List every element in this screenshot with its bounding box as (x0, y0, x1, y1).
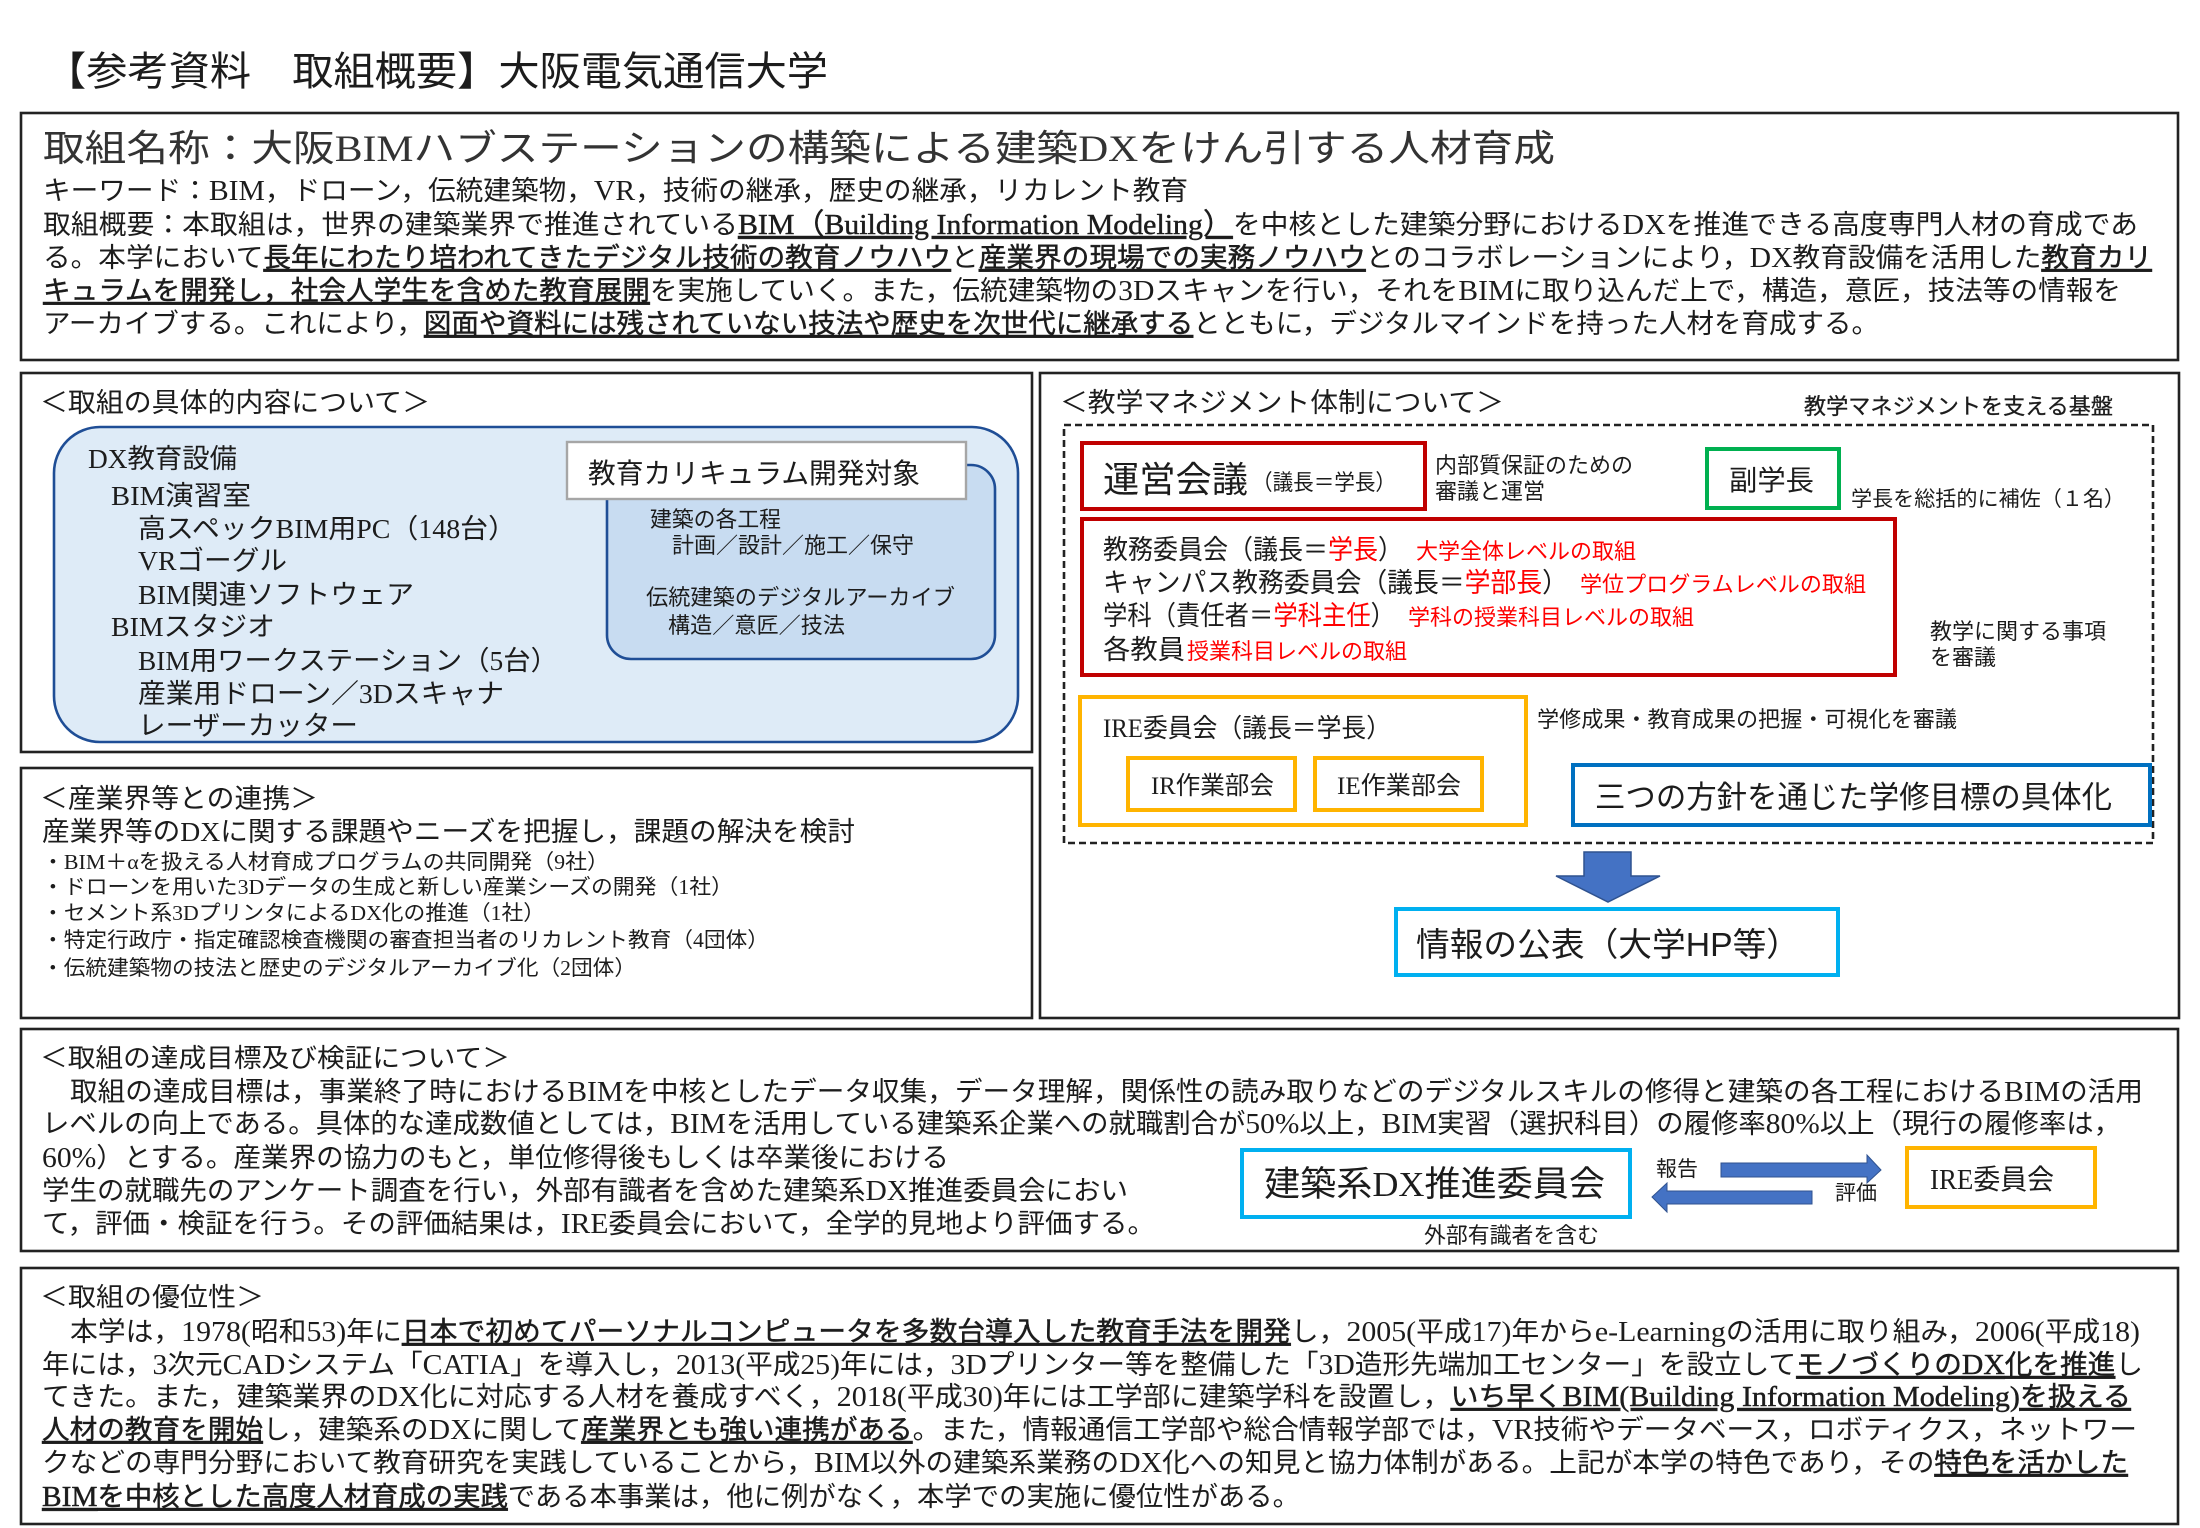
text block: goals: 取組の達成目標は，事業終了時における BIMを中核としたデータ収集，データ理解，関係性の読み取りなどのデジタルスキルの修得と建築の各工程における BIMの活用 (70, 1076, 2143, 1108)
note: council role: 内部質保証のための (1435, 453, 1633, 478)
box: IRE committee: IRE委員会（議長＝学長） (1103, 714, 1391, 743)
dashed frame (1064, 425, 2153, 843)
text block: overview: 取組概要：本取組は，世界の建築業界で推進されている BIM（Building Information Modeling） を中核とした建築分野における DXを推進できる高度専門人材の育成であ (43, 209, 2138, 241)
list: collaboration items (42, 850, 769, 980)
box: vice president: 副学長 (1729, 465, 1814, 496)
list: collaboration items: ・BIM＋αを扱える人材育成プログラムの共同開発（9社） (42, 850, 609, 874)
box: steering council (1082, 443, 1425, 509)
box: DX promotion committee (1242, 1150, 1630, 1217)
box: IRE committee: IE作業部会 (1337, 772, 1461, 800)
box: DX promotion committee: 建築系DX推進委員会 (1264, 1165, 1605, 1204)
box: DX education facilities: BIM用ワークステーション（5台） (138, 646, 558, 676)
list: collaboration items: ・ドローンを用いた3Dデータの生成と新しい産業シーズの開発（1社） (42, 875, 733, 899)
text block: overview: アーカイブする。これにより， 図面や資料には残されていない技法や歴史を次世代に継承する とともに，デジタルマインドを持った人材を育成する。 (43, 309, 1879, 339)
heading: academic management: ＜教学マネジメント体制について＞ (1060, 388, 1504, 418)
text block: goals: て，評価・検証を行う。その評価結果は， IRE委員会において，全学的見地より評価する。 (42, 1208, 1155, 1240)
list: collaboration items: ・特定行政庁・指定確認検査機関の審査担当者のリカレント教育（4団体） (42, 928, 769, 952)
box: IRE committee (1907, 1148, 2095, 1207)
heading: industry collaboration: ＜産業界等との連携＞ (40, 784, 318, 814)
box: DX education facilities: DX教育設備 (88, 444, 237, 474)
box: DX education facilities (54, 427, 1018, 742)
label: evaluation: 評価 (1835, 1182, 1877, 1205)
label: foundation: 教学マネジメントを支える基盤 (1804, 394, 2113, 419)
panel: overview (21, 113, 2178, 360)
box: curriculum targets (607, 465, 995, 659)
box: IRE committee: IRE委員会 (1930, 1164, 2054, 1196)
heading: advantages: ＜取組の優位性＞ (40, 1283, 264, 1312)
box: DX education facilities: 高スペックBIM用PC（148台） (138, 514, 516, 544)
text block: overview: る。本学において長年にわたり培われてきたデジタル技術の教育ノウハウ と産業界の現場での実務ノウハウ とのコラボレーションにより， DX教育設備を活用した教育カリ (43, 242, 2152, 274)
text block: advantages: てきた。また，建築業界の DX化に対応する人材を養成すべく， 2018(平成30)年には工学部に建築学科を設置し， いち早くBIM(Building Information Modeling) を扱える (42, 1381, 2131, 1413)
panel: industry collaboration (21, 768, 1032, 1018)
heading: program name: 取組名称：大阪BIMハブステーションの構築による建築DXをけん引する人材育成 (43, 128, 1555, 170)
note: council role (1435, 453, 1633, 504)
text block: goals: 学生の就職先のアンケート調査を行い，外部有識者を含めた建築系 DX推進委員会におい (42, 1175, 1128, 1207)
text: collaboration summary: 産業界等のDXに関する課題やニーズを把握し，課題の解決を検討 (42, 817, 855, 847)
box: DX education facilities: BIMスタジオ (111, 612, 275, 642)
box: IRE committee: IR作業部会 (1151, 772, 1274, 800)
heading: goals and verification: ＜取組の達成目標及び検証について＞ (40, 1044, 510, 1073)
box: learning goals (1573, 765, 2150, 825)
box: learning goals: 三つの方針を通じた学修目標の具体化 (1595, 780, 2112, 815)
panel: academic management (1040, 373, 2179, 1018)
box: academic committees: 各教員 (1103, 635, 1185, 665)
panel: specific content (21, 373, 1032, 752)
box: steering council: 運営会議 (1103, 459, 1248, 500)
text block: overview (43, 209, 2152, 339)
box: DX education facilities: レーザーカッター (138, 711, 358, 741)
text block: goals: レベルの向上である。具体的な達成数値としては， BIMを活用している建築系企業への就職割合が 50%以上，BIM実習（選択科目）の履修率80%以上（現行の履修率は， (42, 1108, 2121, 1140)
box: academic committees: 教務委員会（議長＝学長） (1103, 535, 1403, 565)
text block: advantages: BIMを中核とした高度人材育成の実践である本事業は，他に例がなく，本学での実施に優位性がある。 (42, 1481, 1300, 1513)
box: DX education facilities: VRゴーグル (138, 546, 287, 576)
box: IRE committee (1080, 697, 1526, 825)
box: DX education facilities: BIM演習室 (111, 481, 251, 511)
box: academic committees: 大学全体レベルの取組 (1416, 539, 1636, 564)
box: academic committees: 学位プログラムレベルの取組 (1580, 572, 1866, 597)
box: DX education facilities: 産業用ドローン／3Dスキャナ (138, 679, 504, 709)
text block: advantages: 人材の教育を開始し，建築系のDXに関して産業界とも強い連携がある 。また，情報通信工学部や総合情報学部では， VR技術やデータベース，ロボティクス，ネットワー (42, 1414, 2137, 1446)
text block: advantages: 本学は，1978(昭和53)年に日本で初めてパーソナルコンピュータを多数台導入した教育手法を開発 し，2005(平成17)年からe-Learningの活用に取り組み，2006(平成18) (70, 1316, 2140, 1348)
text block: overview: キュラムを開発し，社会人学生を含めた教育展開 を実施していく。また，伝統建築物の 3Dスキャンを行い，それをBIMに取り込んだ上で，構造，意匠，技法等の情報を (43, 275, 2121, 307)
label: curriculum development target (567, 442, 966, 499)
label: curriculum development target: 教育カリキュラム開発対象 (588, 458, 920, 490)
box: curriculum targets: 伝統建築のデジタルアーカイブ (646, 585, 955, 610)
box: academic committees: 学科（責任者＝学科主任） (1103, 601, 1395, 631)
box: academic committees: キャンパス教務委員会（議長＝学部長） (1103, 568, 1568, 598)
label: report: 報告 (1656, 1158, 1698, 1181)
text block: advantages (42, 1316, 2143, 1513)
box: vice president (1707, 449, 1839, 508)
box: academic committees: 授業科目レベルの取組 (1187, 639, 1407, 664)
panel: advantages (21, 1268, 2178, 1524)
box: curriculum targets: 建築の各工程 (650, 507, 781, 532)
arrow: evaluation (1652, 1183, 1812, 1212)
box: curriculum targets: 構造／意匠／技法 (668, 613, 845, 638)
box: DX education facilities: BIM関連ソフトウェア (138, 580, 414, 610)
note: council role: 審議と運営 (1435, 479, 1545, 504)
text block: advantages: クなどの専門分野において教育研究を実践していることから， BIM以外の建築系業務のDX化への知見と協力体制がある。上記が本学の特色であり，その 特色を活かした (42, 1447, 2128, 1479)
list: collaboration items: ・伝統建築物の技法と歴史のデジタルアーカイブ化（2団体） (42, 956, 636, 980)
note: deliberation: を審議 (1930, 645, 1996, 670)
box: curriculum targets: 計画／設計／施工／保守 (672, 533, 914, 558)
note: vice president role: 学長を総括的に補佐（１名） (1851, 488, 2125, 511)
panel: goals and verification (21, 1029, 2178, 1251)
note: deliberation (1930, 619, 2106, 670)
note: deliberation: 教学に関する事項 (1930, 619, 2106, 644)
title: 【参考資料 取組概要】大阪電気通信大学 (45, 50, 828, 94)
box: public information: 情報の公表（大学HP等） (1416, 926, 1800, 963)
arrow: down (1556, 852, 1660, 902)
note: IRE role: 学修成果・教育成果の把握・可視化を審議 (1537, 707, 1957, 732)
text: keywords: キーワード：BIM，ドローン，伝統建築物， VR，技術の継承，歴史の継承，リカレント教育 (43, 175, 1188, 207)
text block: goals (42, 1076, 2143, 1240)
list: collaboration items: ・セメント系3DプリンタによるDX化の推進（1社） (42, 901, 545, 925)
box: academic committees: 学科の授業科目レベルの取組 (1408, 605, 1694, 630)
text block: goals: 60%）とする。産業界の協力のもと，単位修得後もしくは卒業後における (42, 1142, 949, 1174)
box: steering council: （議長＝学長） (1252, 470, 1396, 495)
text block: advantages: 年には，3次元CADシステム「CATIA」を導入し，2013(平成25)年には，3Dプリンター等を整備した「 3D造形先端加工センター」を設立して モノづくりのDX化を推進し (42, 1349, 2143, 1381)
note: includes external experts: 外部有識者を含む (1424, 1223, 1599, 1248)
heading: specific content: ＜取組の具体的内容について＞ (40, 388, 430, 418)
box: public information (1396, 909, 1838, 975)
box: academic committees (1082, 519, 1895, 675)
arrow: report (1721, 1155, 1881, 1183)
